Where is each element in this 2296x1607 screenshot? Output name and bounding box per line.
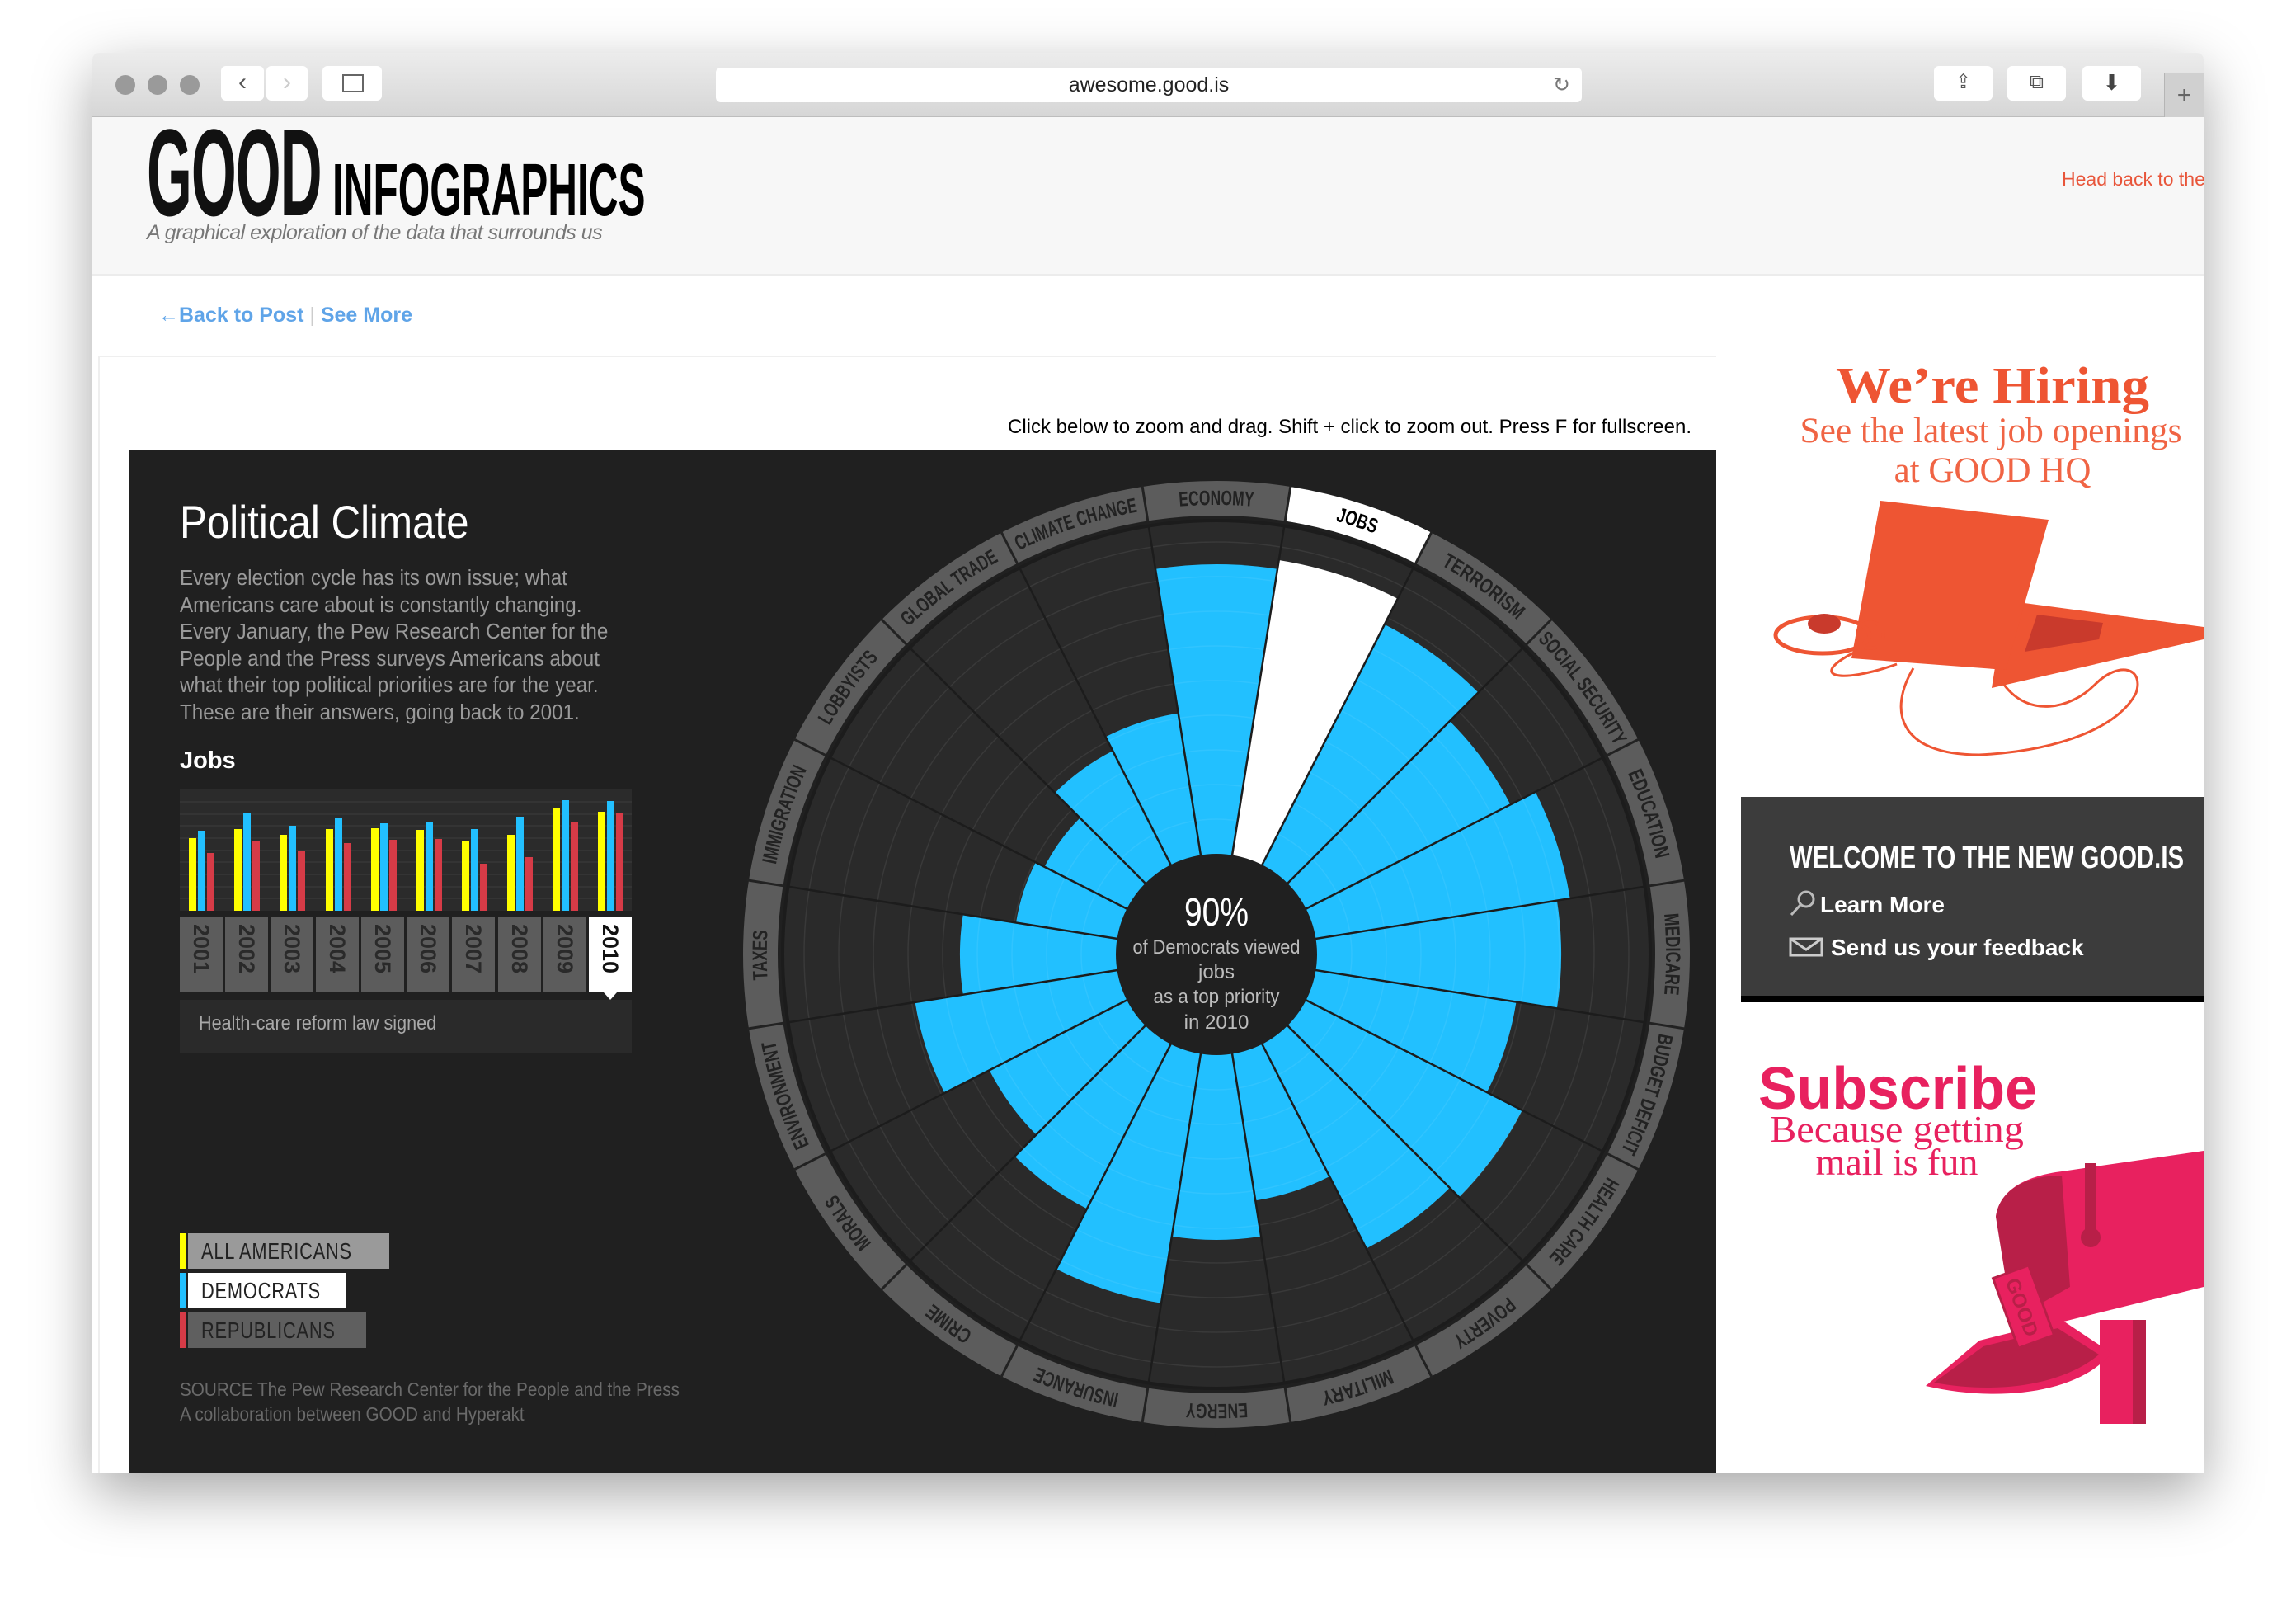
sidebar ad: we're hiring bbox=[1776, 358, 2204, 755]
category labels: MEDICARE bbox=[1664, 914, 1681, 995]
intro paragraph: what their top political priorities are for the year. bbox=[180, 674, 599, 697]
center callout: jobs bbox=[1197, 961, 1235, 983]
toolbar: ⇪ bbox=[1955, 71, 1972, 93]
wedges: democrats share per issue bbox=[911, 555, 1574, 1308]
category labels: TAXES bbox=[752, 931, 767, 980]
category labels: INSURANCE bbox=[1033, 1368, 1118, 1407]
year tabs: 2009 bbox=[553, 924, 577, 973]
category labels: ECONOMY bbox=[1179, 490, 1254, 507]
year tabs: 2004 bbox=[325, 924, 350, 973]
tagline: A graphical exploration of the data that surrounds us bbox=[147, 221, 602, 244]
center callout bbox=[1116, 854, 1317, 1055]
panel: political climate dark bbox=[129, 450, 1716, 1473]
intro paragraph: Americans care about is constantly changing. bbox=[180, 594, 581, 617]
category labels: BUDGET DEFICIT bbox=[1623, 1034, 1673, 1157]
toolbar: ⧉ bbox=[2030, 71, 2044, 93]
sidebar ad: we're hiring: See the latest job openings bbox=[1800, 412, 2182, 450]
category labels: IMMIGRATION bbox=[762, 764, 807, 865]
year tabs: 2003 bbox=[280, 924, 304, 973]
year tabs: 2010 bbox=[598, 924, 623, 973]
bar chart: jobs by year bbox=[180, 789, 632, 911]
toolbar: awesome.good.is bbox=[1069, 73, 1229, 97]
outer label ring bbox=[747, 481, 1686, 1424]
category labels: CRIME bbox=[925, 1303, 970, 1343]
toolbar: + bbox=[2177, 82, 2191, 109]
header bbox=[92, 117, 2204, 276]
category labels: POVERTY bbox=[1455, 1297, 1517, 1350]
annotation box bbox=[180, 1000, 632, 1053]
year tabs: 2002 bbox=[234, 924, 259, 973]
category labels: ENERGY bbox=[1186, 1402, 1247, 1419]
category labels: JOBS bbox=[1336, 508, 1378, 533]
sidebar: welcome box bbox=[1741, 797, 2204, 1002]
intro paragraph bbox=[180, 567, 608, 724]
category labels: GLOBAL TRADE bbox=[901, 549, 998, 624]
title: Political Climate bbox=[180, 496, 469, 548]
category labels: EDUCATION bbox=[1628, 769, 1669, 858]
center callout: of Democrats viewed bbox=[1133, 936, 1300, 959]
category labels: HEALTH CARE bbox=[1549, 1177, 1620, 1266]
category labels: MILITARY bbox=[1324, 1369, 1394, 1406]
year tabs: 2005 bbox=[370, 924, 395, 973]
nav links: ←Back to Post | See More bbox=[158, 304, 412, 327]
intro paragraph: These are their answers, going back to 2001. bbox=[180, 701, 580, 724]
icon: mailbox illustration: GOOD bbox=[2001, 1275, 2042, 1340]
radial chart: top priorities wheel bbox=[743, 481, 1690, 1428]
sidebar ad: we're hiring: We’re Hiring bbox=[1836, 358, 2149, 414]
legend: REPUBLICANS bbox=[201, 1317, 336, 1343]
icon: envelope bbox=[1790, 939, 1822, 955]
toolbar: ↻ bbox=[1553, 73, 1570, 97]
toolbar: › bbox=[283, 68, 291, 96]
logo INFOGRAPHICS: INFOGRAPHICS bbox=[332, 149, 646, 232]
legend bbox=[180, 1233, 389, 1348]
sidebar ad: subscribe: Because getting bbox=[1770, 1108, 2024, 1150]
icon: mailbox illustration bbox=[1926, 1151, 2204, 1424]
category labels: CLIMATE CHANGE bbox=[1014, 498, 1137, 549]
year tabs bbox=[180, 917, 632, 1000]
category labels: LOBBYISTS bbox=[818, 650, 877, 725]
year tabs: 2001 bbox=[189, 924, 214, 973]
year tabs: 2006 bbox=[416, 924, 440, 973]
category labels: ENVIRONMENT bbox=[761, 1043, 809, 1150]
annotation box: Health-care reform law signed bbox=[199, 1012, 436, 1034]
icon: magnifier bbox=[1791, 892, 1814, 915]
category labels: SOCIAL SECURITY bbox=[1539, 632, 1627, 742]
category labels: TERRORISM bbox=[1445, 553, 1526, 620]
legend: DEMOCRATS bbox=[201, 1278, 321, 1303]
toolbar bbox=[92, 53, 2204, 117]
intro paragraph: Every election cycle has its own issue; what bbox=[180, 567, 567, 590]
sidebar: welcome box: Learn More bbox=[1820, 892, 1945, 917]
instructions: Click below to zoom and drag. Shift + click to zoom out. Press F for fullscreen. bbox=[1008, 416, 1691, 438]
intro paragraph: Every January, the Pew Research Center for the bbox=[180, 620, 608, 643]
sidebar ad: subscribe: Subscribe bbox=[1758, 1056, 2037, 1122]
category labels bbox=[752, 490, 1681, 1419]
source credits: SOURCE The Pew Research Center for the People and the Press bbox=[180, 1378, 680, 1400]
center callout: 90% bbox=[1184, 891, 1249, 935]
logo GOOD: GOOD bbox=[147, 103, 322, 242]
icon: laptop illustration bbox=[1776, 501, 2204, 755]
source credits bbox=[180, 1378, 680, 1425]
year tabs: 2007 bbox=[461, 924, 486, 973]
legend: ALL AMERICANS bbox=[201, 1238, 352, 1264]
content box border bbox=[98, 356, 1716, 1510]
toolbar: ⬇ bbox=[2103, 70, 2120, 95]
center callout: as a top priority bbox=[1153, 986, 1280, 1008]
toolbar: ‹ bbox=[238, 68, 247, 96]
sidebar: welcome box: WELCOME TO THE NEW GOOD.IS bbox=[1790, 841, 2184, 875]
source credits: A collaboration between GOOD and Hyperakt bbox=[180, 1403, 525, 1425]
sidebar ad: we're hiring: at GOOD HQ bbox=[1894, 451, 2091, 490]
subheading jobs: Jobs bbox=[180, 747, 236, 774]
head back link: Head back to the bbox=[2062, 168, 2204, 190]
year tabs: 2008 bbox=[507, 924, 532, 973]
center callout: in 2010 bbox=[1184, 1011, 1249, 1034]
sidebar ad: subscribe bbox=[1758, 1056, 2204, 1424]
category labels: MORALS bbox=[826, 1196, 871, 1251]
sidebar: welcome box: Send us your feedback bbox=[1831, 935, 2084, 960]
intro paragraph: People and the Press surveys Americans about bbox=[180, 647, 600, 670]
sidebar ad: subscribe: mail is fun bbox=[1816, 1141, 1978, 1183]
